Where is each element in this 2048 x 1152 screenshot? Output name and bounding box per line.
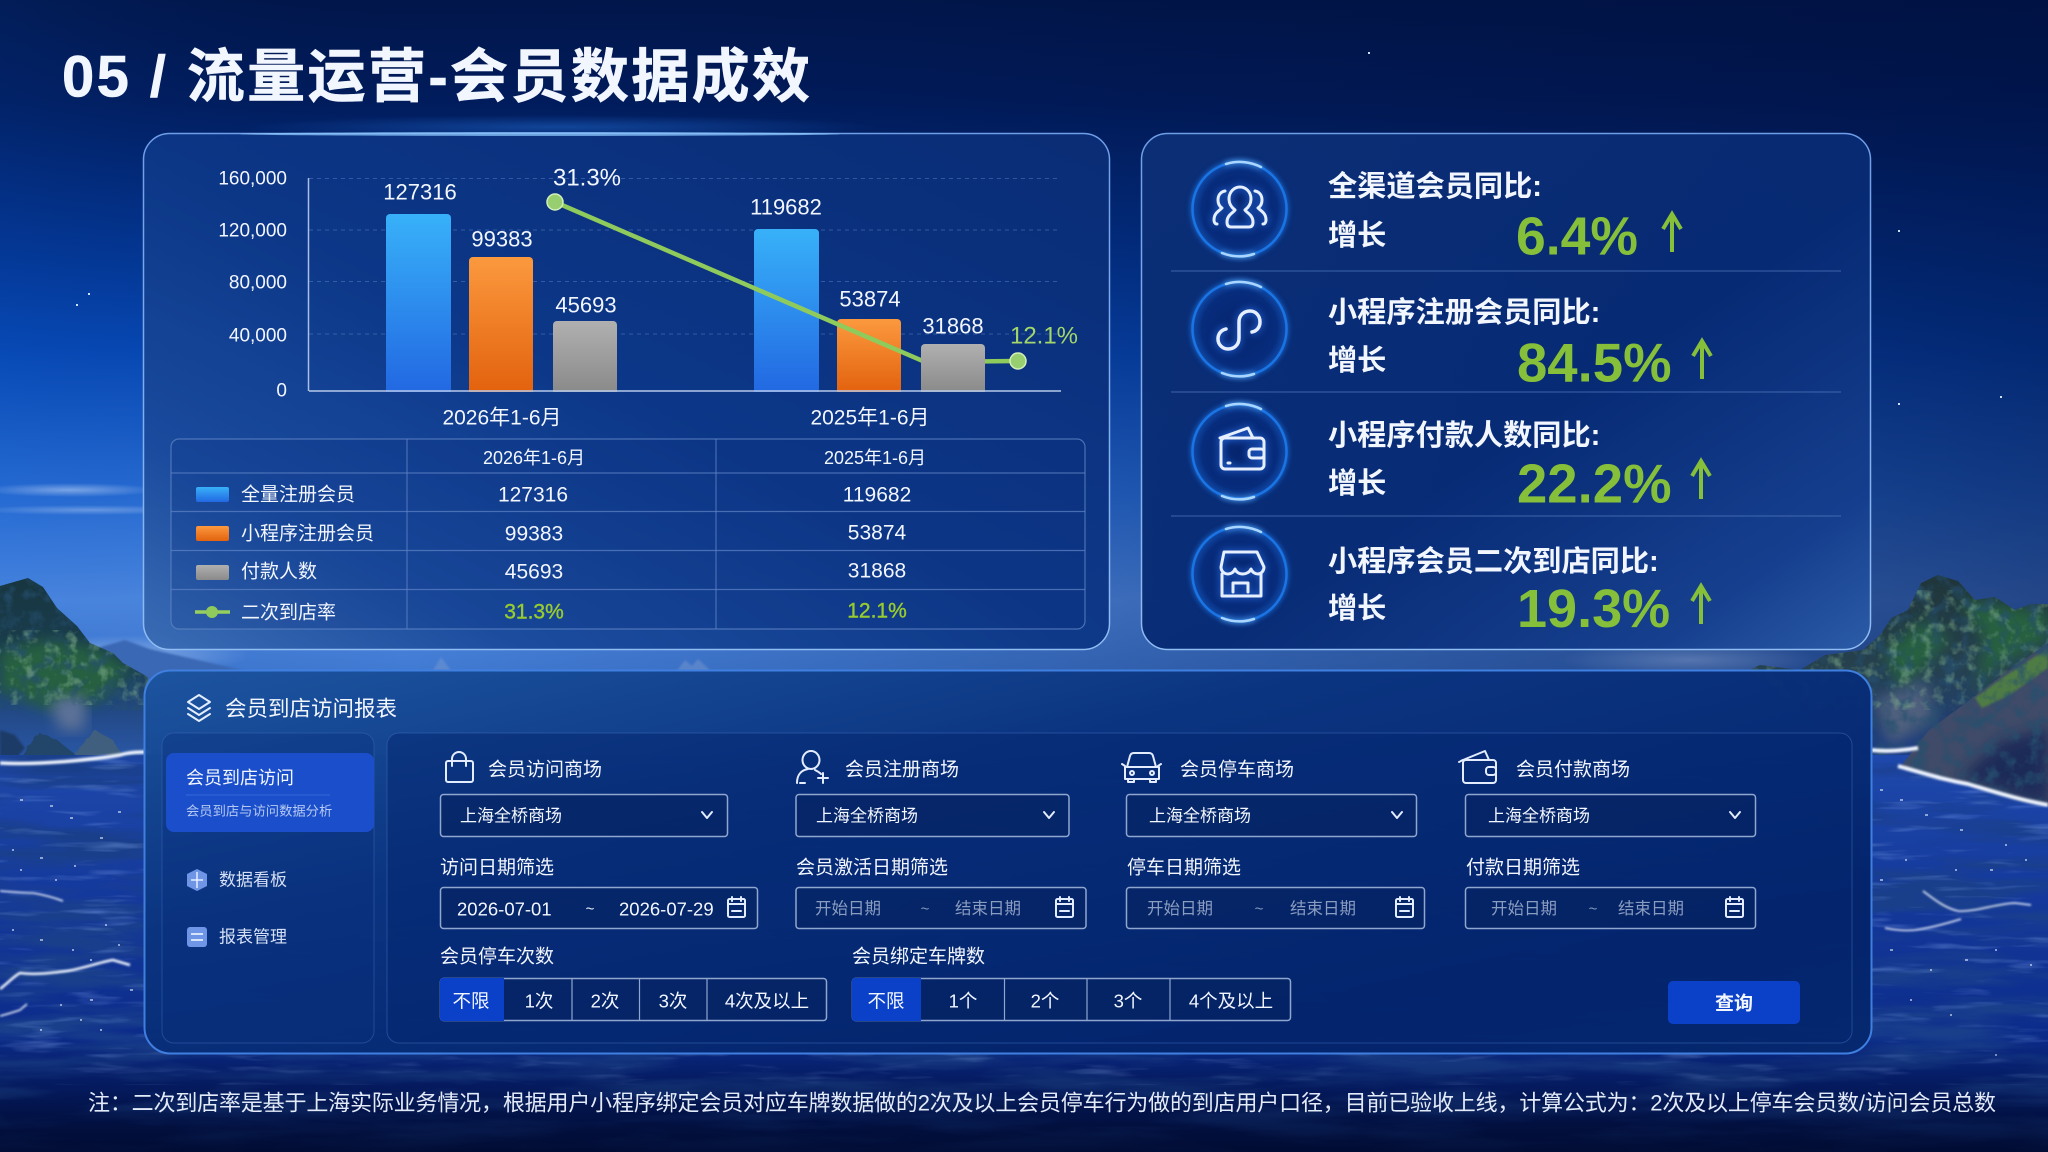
icon: layers: [188, 695, 210, 721]
icon: calendar: [1726, 897, 1743, 917]
legend row: payers: 31868: [848, 560, 906, 582]
filter: visit mall: 2026-07-29: [619, 898, 714, 920]
filter: visit mall: 会员访问商场: [488, 758, 602, 780]
icon: wallet: [1192, 404, 1286, 499]
bar chart with trend line: 2025年1-6月: [810, 406, 930, 430]
filter: visit mall: 上海全桥商场: [460, 806, 562, 826]
data table: 2026年1-6月: [483, 448, 585, 468]
bar chart with trend line: 99383: [471, 226, 533, 252]
filter: parking mall: [1122, 753, 1424, 928]
segmented control: plate count: 3个: [1114, 990, 1142, 1012]
segmented control: plate count: 会员绑定车牌数: [852, 946, 985, 968]
arrow up: [1692, 461, 1710, 499]
KPI: repeat visits: [1192, 527, 1710, 639]
icon: bag: [446, 752, 473, 782]
icon: mini program: [1192, 282, 1286, 376]
arrow up: [1692, 586, 1710, 624]
bar chart with trend line: 53874: [839, 286, 901, 312]
filter: payment mall: 会员付款商场: [1516, 758, 1630, 780]
KPI: repeat visits: 增长: [1328, 592, 1386, 625]
title: 05 / 流量运营-会员数据成效: [62, 44, 810, 110]
panel: member visit report: [144, 670, 1872, 1054]
segmented control: plate count: 不限: [867, 990, 905, 1012]
KPI: mini program registered members: 84.5%: [1517, 332, 1672, 394]
KPI: mini program registered members: [1192, 282, 1711, 394]
legend row: repeat visit rate: [195, 600, 907, 624]
filter: visit mall: 2026-07-01: [457, 898, 552, 920]
segmented control: plate count: 4个及以上: [1189, 990, 1273, 1012]
filter: parking mall: 结束日期: [1290, 899, 1356, 918]
data table: 2025年1-6月: [824, 448, 926, 468]
report heading: 会员到店访问报表: [225, 697, 397, 721]
nav item: reports: [187, 927, 287, 947]
legend row: total members: 119682: [843, 484, 911, 506]
legend row: total members: 127316: [498, 484, 568, 506]
nav item: reports: 报表管理: [219, 928, 287, 946]
legend row: payers: 45693: [505, 560, 563, 584]
filter: payment mall: 付款日期筛选: [1466, 856, 1580, 878]
legend row: payers: 付款人数: [241, 560, 317, 582]
segmented control: plate count: 2个: [1031, 990, 1059, 1012]
legend row: mini program members: 99383: [505, 522, 563, 546]
bar chart with trend line: 80,000: [229, 272, 287, 294]
KPI: all-channel members: 6.4%: [1516, 208, 1638, 266]
bar chart with trend line: 12.1%: [1010, 322, 1078, 350]
sidebar: [162, 733, 374, 1043]
filter: visit mall: ~: [586, 900, 595, 918]
KPI: repeat visits: 19.3%: [1517, 579, 1670, 639]
panel: member chart and table: [144, 132, 1110, 650]
foam along shorelines: [0, 748, 2048, 1016]
KPI: mini program payers: 22.2%: [1517, 454, 1672, 514]
sparkles on water: [12, 790, 2032, 1055]
legend row: repeat visit rate: 二次到店率: [241, 602, 336, 624]
segmented control: parking count: 不限: [452, 990, 490, 1012]
legend row: repeat visit rate: 12.1%: [847, 600, 907, 622]
bar chart with trend line: 31868: [922, 314, 984, 338]
bar chart with trend line: 119682: [750, 194, 822, 220]
legend row: repeat visit rate: 31.3%: [504, 600, 564, 624]
bar chart with trend line: 0: [276, 380, 287, 402]
filter: register mall: 会员注册商场: [845, 758, 959, 780]
filter: register mall: 开始日期: [815, 899, 881, 918]
KPI: mini program payers: [1192, 404, 1710, 514]
filter: parking mall: ~: [1255, 900, 1264, 918]
filter: register mall: 结束日期: [955, 899, 1021, 918]
filter: visit mall: 访问日期筛选: [440, 856, 554, 878]
segmented control: plate count: [852, 946, 1290, 1021]
filter: payment mall: 上海全桥商场: [1488, 806, 1590, 826]
nav item: dashboard: 数据看板: [219, 870, 287, 890]
filter: payment mall: 结束日期: [1618, 899, 1684, 918]
filter area: [387, 733, 1852, 1043]
filter: register mall: ~: [921, 900, 930, 918]
filter: parking mall: 开始日期: [1147, 899, 1213, 918]
legend row: payers: [196, 560, 906, 584]
segmented control: parking count: 4次及以上: [725, 990, 809, 1012]
legend row: total members: [196, 484, 911, 506]
icon: calendar: [1396, 897, 1413, 917]
KPI: mini program payers: 小程序付款人数同比:: [1328, 419, 1600, 452]
arrow up: [1663, 214, 1681, 252]
icon: members: [1192, 162, 1286, 256]
nav item: dashboard: [187, 869, 287, 891]
bar chart with trend line: [218, 164, 1078, 430]
segmented control: parking count: 3次: [659, 990, 687, 1012]
arrow up: [1693, 341, 1711, 379]
icon: add member: [797, 751, 828, 783]
filter: parking mall: 停车日期筛选: [1127, 856, 1241, 878]
bar chart with trend line: 120,000: [218, 220, 287, 242]
legend row: mini program members: 53874: [848, 522, 907, 544]
filter: payment mall: 开始日期: [1491, 899, 1557, 918]
filter: payment mall: ~: [1589, 900, 1598, 918]
active nav item: 会员到店访问: [186, 768, 294, 788]
filter: register mall: 上海全桥商场: [816, 806, 918, 826]
icon: calendar: [1056, 897, 1073, 917]
bar chart with trend line: 2026年1-6月: [442, 406, 562, 430]
panel: growth KPIs: [1142, 134, 1870, 650]
bar chart with trend line: 45693: [555, 292, 617, 318]
filter: register mall: [796, 751, 1086, 928]
KPI: all-channel members: 增长: [1328, 219, 1386, 252]
KPI: mini program registered members: 小程序注册会员同比:: [1328, 296, 1600, 329]
segmented control: parking count: 1次: [525, 990, 553, 1012]
KPI: all-channel members: 全渠道会员同比:: [1328, 170, 1542, 203]
KPI: repeat visits: 小程序会员二次到店同比:: [1328, 545, 1659, 578]
bar chart with trend line: 40,000: [229, 326, 287, 346]
icon: car: [1122, 753, 1161, 782]
legend row: mini program members: 小程序注册会员: [241, 522, 374, 544]
icon: store: [1192, 527, 1286, 621]
icon: wallet: [1459, 751, 1496, 783]
bar chart with trend line: 160,000: [218, 168, 287, 190]
filter: parking mall: 会员停车商场: [1180, 758, 1294, 780]
filter: parking mall: 上海全桥商场: [1149, 806, 1251, 826]
active nav item: 会员到店与访问数据分析: [186, 804, 332, 818]
KPI: mini program registered members: 增长: [1328, 344, 1386, 377]
bar chart with trend line: 127316: [383, 180, 457, 204]
KPI: all-channel members: [1192, 162, 1681, 266]
stars: [76, 52, 2002, 405]
segmented control: parking count: [440, 946, 826, 1021]
footnote: 注：二次到店率是基于上海实际业务情况，根据用户小程序绑定会员对应车牌数据做的2次及以上会员停车行为做的到店用户口径，目前已验收上线，计算公式为：2次及以上停车会员数/访问会员总数: [88, 1090, 1996, 1116]
front rock on right shore: [1895, 640, 2048, 810]
legend row: mini program members: [196, 522, 907, 546]
filter: register mall: 会员激活日期筛选: [796, 856, 948, 878]
segmented control: parking count: 2次: [591, 990, 619, 1012]
icon: calendar: [728, 897, 745, 917]
filter: payment mall: [1459, 751, 1756, 928]
bar chart with trend line: 31.3%: [553, 164, 621, 192]
query button: [1668, 981, 1800, 1024]
legend row: total members: 全量注册会员: [241, 484, 355, 506]
filter: visit mall: [440, 752, 758, 928]
segmented control: parking count: 会员停车次数: [440, 946, 554, 968]
active nav item: [166, 753, 374, 832]
segmented control: plate count: 1个: [949, 990, 977, 1012]
query button: 查询: [1715, 992, 1753, 1014]
KPI: mini program payers: 增长: [1328, 467, 1386, 500]
data table: [171, 439, 1085, 629]
